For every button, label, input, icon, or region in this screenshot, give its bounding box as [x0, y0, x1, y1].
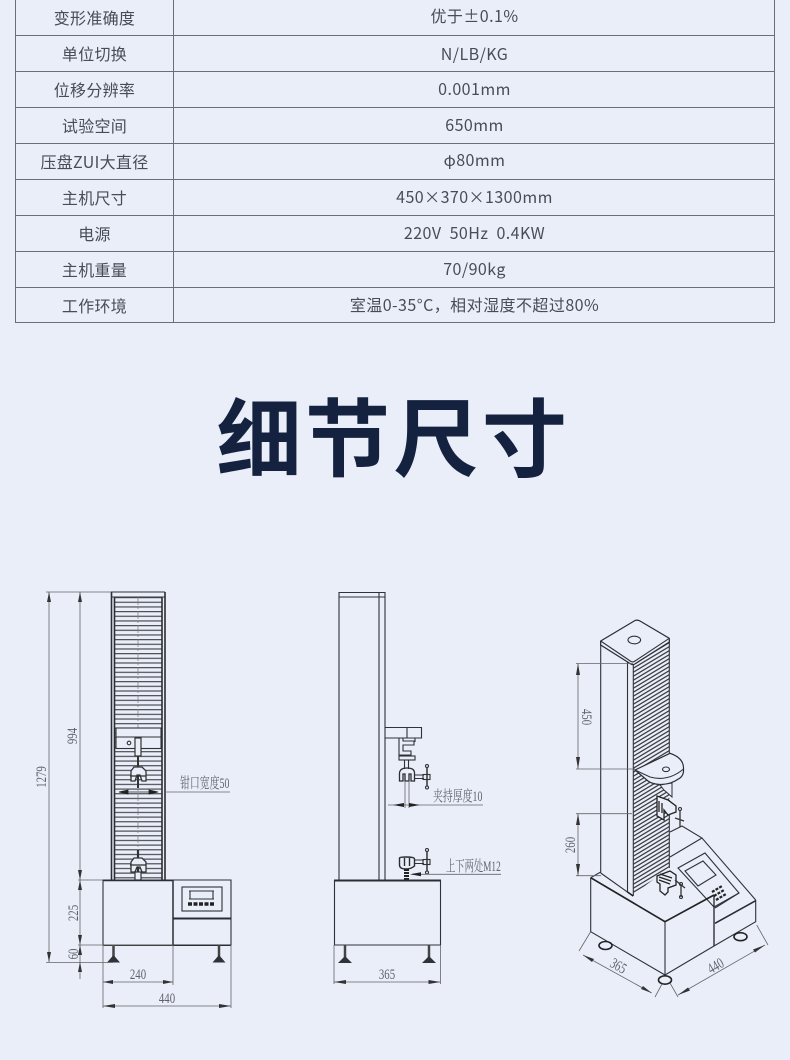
- dimension lines: [576, 664, 768, 997]
- crosshead disc: [635, 753, 684, 785]
- dimension labels: 994: [63, 728, 80, 744]
- base: [103, 880, 231, 945]
- row: working environment: [62, 292, 599, 317]
- feet: [599, 933, 747, 984]
- row: platen diameter: φ80mm: [444, 147, 505, 171]
- callout: clamp thickness: [388, 787, 483, 807]
- dimension 365: [334, 945, 440, 984]
- title: 细节尺寸: [216, 372, 571, 495]
- row: main unit size: 主机尺寸: [62, 185, 127, 209]
- row: power: 220V 50Hz 0.4KW: [404, 220, 545, 244]
- dimension labels: 225: [64, 905, 81, 921]
- callout: jaw width: [165, 774, 230, 792]
- row: main unit weight: [62, 256, 506, 281]
- dimension labels: 240: [130, 965, 146, 982]
- dimension labels: 440: [704, 954, 727, 977]
- callout: M12: [410, 857, 501, 876]
- tower with slats: [111, 592, 165, 880]
- dimension labels: 440: [159, 989, 175, 1006]
- dimension labels: [561, 709, 727, 977]
- lower clamp: [657, 871, 685, 898]
- lower side clamp: [400, 848, 430, 879]
- jaw width arrows: [119, 790, 158, 794]
- dimension 365: 365: [379, 965, 395, 982]
- row: deformation accuracy: 优于±0.1%: [430, 3, 519, 27]
- row: unit switching: 单位切换: [62, 41, 127, 65]
- top cap: [601, 620, 669, 665]
- callout: clamp thickness: 夹持厚度10: [433, 787, 482, 805]
- dimension labels: [32, 728, 175, 1006]
- row: power: [78, 220, 545, 245]
- row: platen diameter: 压盘ZUI大直径: [40, 149, 149, 173]
- row: test space: 650mm: [445, 112, 504, 136]
- dimension lines: [46, 592, 231, 1008]
- dimension labels: 60: [64, 948, 81, 959]
- feet: [338, 945, 436, 963]
- lower clamp: [130, 850, 146, 880]
- column: [601, 640, 669, 896]
- dimension labels: 1279: [32, 766, 49, 788]
- crosshead and upper clamp: [116, 728, 161, 788]
- row: deformation accuracy: [54, 3, 519, 29]
- row: main unit weight: 主机重量: [62, 257, 127, 281]
- base box: [591, 872, 756, 975]
- console top: [670, 826, 756, 907]
- isometric view drawing: [561, 620, 768, 997]
- row: test space: 试验空间: [62, 113, 127, 137]
- row: platen diameter: [40, 147, 505, 173]
- row: displacement resolution: 位移分辨率: [54, 77, 135, 101]
- dimension labels: 260: [561, 837, 578, 853]
- specification table: [16, 0, 774, 322]
- front view drawing: [32, 592, 231, 1008]
- upper clamp: [657, 783, 684, 827]
- callout: M12: 上下两处M12: [446, 857, 501, 875]
- row: working environment: 室温0-35°C，相对湿度不超过80%: [350, 292, 599, 316]
- side view drawing: [334, 592, 501, 984]
- crosshead arm: [385, 728, 422, 760]
- control panel: [182, 887, 222, 911]
- row: main unit size: [62, 184, 553, 209]
- table grid: [16, 0, 774, 322]
- row: displacement resolution: [54, 76, 511, 101]
- dimension labels: 365: [607, 954, 630, 977]
- row: unit switching: [62, 41, 508, 65]
- row: main unit weight: 70/90kg: [443, 256, 506, 280]
- row: main unit size: 450×370×1300mm: [396, 184, 553, 208]
- row: power: 电源: [78, 221, 111, 245]
- row: unit switching: N/LB/KG: [441, 41, 508, 65]
- row: test space: [62, 112, 504, 137]
- callout: jaw width: 钳口宽度50: [180, 774, 229, 792]
- dimension labels: 450: [579, 709, 596, 725]
- tower: [339, 592, 385, 880]
- upper side clamp: [400, 760, 430, 808]
- row: deformation accuracy: 变形准确度: [54, 5, 135, 29]
- row: displacement resolution: 0.001mm: [438, 76, 511, 100]
- row: working environment: 工作环境: [62, 293, 127, 317]
- feet: [107, 945, 226, 962]
- base: [334, 880, 441, 945]
